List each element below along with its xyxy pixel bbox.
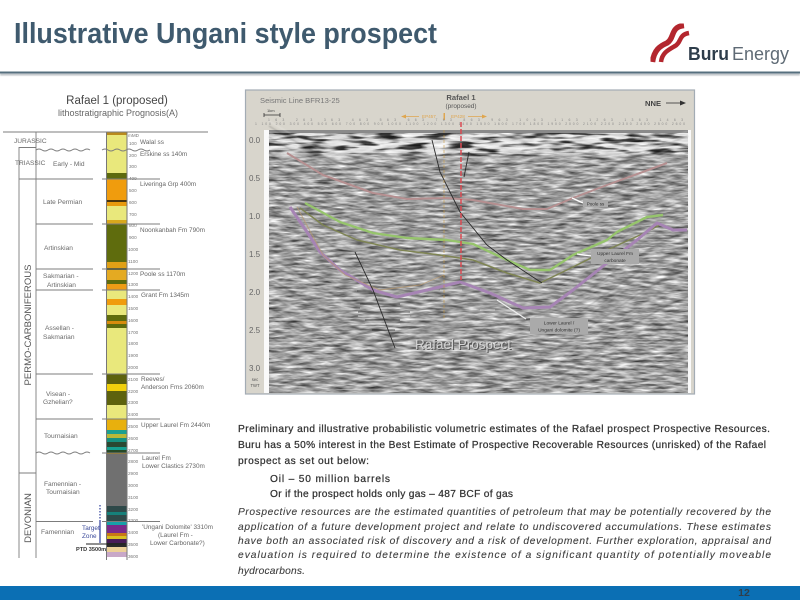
- lithology column: [106, 132, 128, 562]
- stage labels: Visean -: [46, 391, 70, 398]
- seismic header: EP457: [422, 114, 436, 119]
- formation labels: Grant Fm 1345m: [141, 292, 189, 299]
- depth scale: 3300: [128, 518, 139, 523]
- two-way-time axis: 2.0: [249, 288, 261, 297]
- era labels: JURASSIC: [14, 138, 47, 145]
- era labels: TRIASSIC: [15, 160, 46, 167]
- horizon: Ungani dolomite: [290, 207, 687, 308]
- stage labels: Sakmarian: [43, 334, 75, 341]
- target zone marker: PTD 3500m: [76, 547, 106, 553]
- stage labels: Early - Mid: [53, 161, 85, 168]
- header rule: [0, 72, 800, 76]
- stage labels: Artinskian: [44, 245, 73, 252]
- depth scale: 800: [129, 223, 137, 228]
- horizon: Upper Laurel carbonate: [305, 203, 663, 270]
- depth scale: [128, 133, 140, 559]
- depth scale: 300: [129, 164, 137, 169]
- permit boundary: [443, 130, 445, 320]
- formation labels: (Laurel Fm -: [158, 532, 193, 539]
- era labels: [14, 138, 47, 543]
- depth scale: 900: [129, 235, 137, 240]
- two-way-time axis: sec: [252, 377, 258, 382]
- depth scale: 1000: [128, 247, 139, 252]
- two-way-time axis: [249, 136, 261, 388]
- depth scale: 2000: [128, 365, 139, 370]
- formation labels: Upper Laurel Fm 2440m: [141, 422, 210, 429]
- horizon: lower olive: [300, 208, 660, 283]
- logo: Buru Energy: [652, 26, 789, 64]
- depth scale: 2600: [128, 436, 139, 441]
- stage labels: Late Permian: [43, 199, 83, 206]
- seismic header: NNE: [645, 99, 661, 108]
- two-way-time axis: 1.5: [249, 250, 261, 259]
- formation labels: Walal ss: [140, 139, 164, 146]
- depth scale: 600: [129, 200, 137, 205]
- formation labels: Anderson Fms 2060m: [141, 384, 204, 391]
- footer bar: [0, 586, 800, 600]
- depth scale: 3500: [128, 542, 139, 547]
- label: Rafael Prospect: Rafael Prospect: [415, 337, 511, 352]
- seismic frame: [246, 90, 694, 394]
- heading: Rafael 1 proposed: [58, 95, 178, 118]
- faults: [355, 140, 542, 348]
- formation labels: Liveringa Grp 400m: [140, 181, 196, 188]
- depth scale: 2500: [128, 424, 139, 429]
- depth scale: 1800: [128, 341, 139, 346]
- seismic header: (proposed): [446, 103, 476, 110]
- depth scale: 2900: [128, 471, 139, 476]
- formation labels: [140, 139, 213, 547]
- text block: definition note: have both an associated risk of discovery and a risk of development. Further exploration, appraisal and: [238, 536, 771, 547]
- era labels: PERMO-CARBONIFEROUS: [23, 265, 34, 385]
- depth scale: 2100: [128, 377, 139, 382]
- two-way-time axis: 3.0: [249, 364, 261, 373]
- depth scale: 2800: [128, 459, 139, 464]
- panel: seismic section: [246, 90, 694, 394]
- seismic header: Seismic Line BFR13-25: [260, 96, 340, 105]
- text block: definition note: hydrocarbons.: [238, 566, 305, 577]
- stage labels: Famennian: [41, 529, 74, 536]
- depth scale: 1700: [128, 330, 139, 335]
- logo wordmark: [688, 44, 789, 64]
- formation labels: Laurel Fm: [142, 455, 171, 462]
- depth scale: 3200: [128, 507, 139, 512]
- stage labels: Famennian -: [44, 481, 81, 488]
- depth scale: 500: [129, 188, 137, 193]
- heading: Rafael 1 proposed: Rafael 1 (proposed): [66, 95, 168, 107]
- depth scale: 1600: [128, 318, 139, 323]
- depth scale: 2200: [128, 389, 139, 394]
- stage labels: Gzhelian?: [43, 399, 73, 406]
- depth scale: 3400: [128, 530, 139, 535]
- text block: prospective resources summary: Or if the prospect holds only gas – 487 BCF of gas: [270, 489, 513, 500]
- callout: Upper Laurel Fm carbonate: carbonate: [604, 258, 626, 264]
- heading: Rafael 1 proposed: lithostratigraphic Prognosis(A): [58, 108, 178, 118]
- logo wordmark: Buru: [688, 44, 729, 64]
- two-way-time axis: 2.5: [249, 326, 261, 335]
- era labels: DEVONIAN: [23, 493, 34, 543]
- depth scale: 2400: [128, 412, 139, 417]
- formation labels: Poole ss 1170m: [140, 271, 185, 278]
- callout: Poole ss: Poole ss: [587, 202, 605, 206]
- seismic header: 163 263 363 463 563 663 763 863 963 1063 1163 1263 1363 1463: [268, 118, 683, 122]
- two-way-time axis: 0.0: [249, 136, 261, 145]
- callout: Upper Laurel Fm carbonate: Upper Laurel Fm: [597, 251, 633, 257]
- stage labels: Artinskian: [47, 282, 76, 289]
- stage labels: [41, 161, 85, 536]
- depth scale: mMD: [128, 133, 140, 138]
- stage labels: Sakmarian -: [43, 273, 79, 280]
- chart frame lines: [3, 132, 208, 558]
- depth scale: 3600: [128, 554, 139, 559]
- text block: prospective resources summary: Preliminary and illustrative probabilistic volumetric estimates of the Rafael prospect Prospective Resources.: [238, 424, 770, 435]
- target zone marker: Zone: [82, 533, 97, 540]
- icon: red swoosh: [652, 26, 689, 62]
- page number: 12: [738, 587, 750, 599]
- two-way-time axis: 1.0: [249, 212, 261, 221]
- seismic header: EP428: [451, 114, 465, 119]
- formation labels: Lower Carbonate?): [150, 540, 205, 547]
- depth scale: 3100: [128, 495, 139, 500]
- formation labels: Reeves/: [141, 376, 165, 383]
- well track: Rafael 1: [460, 122, 462, 280]
- stage labels: Assellan -: [45, 325, 74, 332]
- depth scale: 100: [129, 141, 137, 146]
- text block: prospective resources summary: prospect as set out below:: [238, 456, 369, 467]
- text block: definition note: Prospective resources are the estimated quantities of petroleum that may be potentially recovered by the: [238, 507, 771, 518]
- callout: Poole ss: [572, 198, 608, 207]
- depth scale: 2700: [128, 448, 139, 453]
- formation labels: Erskine ss 140m: [140, 151, 187, 158]
- horizon: orange fault trace: [297, 207, 444, 290]
- stage labels: Tournaisian: [46, 489, 80, 496]
- depth scale: 1500: [128, 306, 139, 311]
- text block: definition note: [238, 507, 771, 577]
- panel: stratigraphic column: [3, 95, 213, 562]
- depth scale: 1100: [128, 259, 138, 264]
- title: Illustrative Ungani style prospect: [14, 18, 437, 50]
- text block: prospective resources summary: [238, 424, 770, 500]
- seismic image: [264, 121, 691, 393]
- callout: Upper Laurel Fm carbonate: [577, 249, 639, 264]
- depth scale: 1400: [128, 294, 139, 299]
- text block: definition note: evaluation is required to determine the existence of a significant quantity of potentially moveable: [238, 550, 771, 561]
- callout: Lower Laurel / Ungani dolomite: Ungani dolomite (?): [538, 328, 580, 334]
- depth scale: 200: [129, 153, 137, 158]
- depth scale: 1900: [128, 353, 139, 358]
- horizon: Poole ss: [287, 153, 667, 209]
- two-way-time axis: 0.5: [249, 174, 261, 183]
- text block: definition note: application of a future development project and relate to undiscovered accumulations. These estimates: [238, 522, 771, 533]
- depth scale: 400: [129, 176, 137, 181]
- seismic header: 1 100 200 300 400 500 600 700 800 900 1000 1100 1200 1300 1400 1500 1600 1700 1800 1900 2000 2100 2200 2300 2400 2500 2600: [255, 122, 685, 126]
- depth scale: 1200: [128, 271, 139, 276]
- text block: prospective resources summary: Oil – 50 million barrels: [270, 474, 390, 485]
- depth scale: 1300: [128, 282, 139, 287]
- depth scale: 2300: [128, 400, 139, 405]
- seismic header: Rafael 1: [446, 93, 476, 102]
- target zone marker: [76, 505, 125, 553]
- seismic header: 1km: [267, 108, 275, 113]
- two-way-time axis: TWT: [250, 383, 260, 388]
- logo wordmark: Energy: [732, 44, 789, 64]
- formation labels: 'Ungani Dolomite' 3310m: [142, 524, 213, 531]
- stage labels: Tournaisian: [44, 433, 78, 440]
- depth scale: 3000: [128, 483, 139, 488]
- callout: Lower Laurel / Ungani dolomite: [497, 300, 588, 334]
- formation labels: Lower Clastics 2730m: [142, 463, 205, 470]
- label: Rafael Prospect: Rafael Prospect: [416, 338, 512, 353]
- callout: Lower Laurel / Ungani dolomite: Lower Laurel /: [544, 320, 575, 326]
- depth scale: 700: [129, 212, 137, 217]
- text block: prospective resources summary: Buru has a 50% interest in the Best Estimate of Prospective Recoverable Resources (unrisked) of the Rafael: [238, 440, 766, 451]
- seismic header: [255, 93, 686, 126]
- target zone marker: Target: [82, 525, 100, 532]
- formation labels: Noonkanbah Fm 790m: [140, 227, 205, 234]
